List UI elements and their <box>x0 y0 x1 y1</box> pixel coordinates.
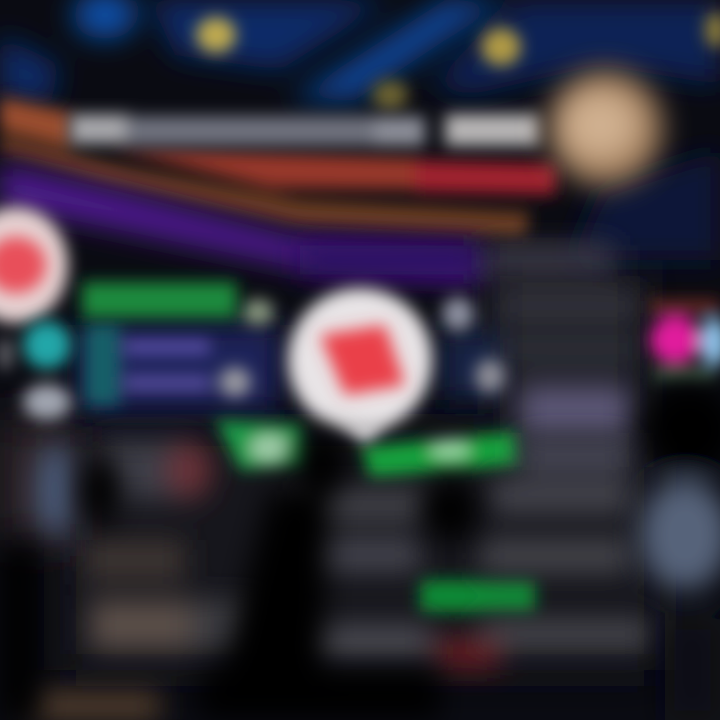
lower gray store rows <box>30 440 650 720</box>
store rows <box>85 297 505 405</box>
purple band <box>0 164 480 282</box>
sign tail <box>340 420 385 445</box>
banner text band <box>70 114 540 146</box>
right neon pink and blue signs <box>650 300 720 380</box>
central white circle sign <box>288 288 432 445</box>
left circle sign <box>0 207 68 323</box>
left small colour signs <box>0 321 71 420</box>
red emblem <box>320 325 405 395</box>
ceiling lights <box>196 12 720 110</box>
mid-section store backdrop <box>80 245 640 435</box>
ceiling: dark blue panels <box>0 0 720 260</box>
lower hall ambient tone <box>0 260 660 670</box>
red emblem left <box>0 237 46 293</box>
beige globe lamp <box>547 70 663 186</box>
silhouettes of people <box>0 384 720 720</box>
green signs <box>82 282 535 612</box>
banner bands <box>0 97 558 238</box>
